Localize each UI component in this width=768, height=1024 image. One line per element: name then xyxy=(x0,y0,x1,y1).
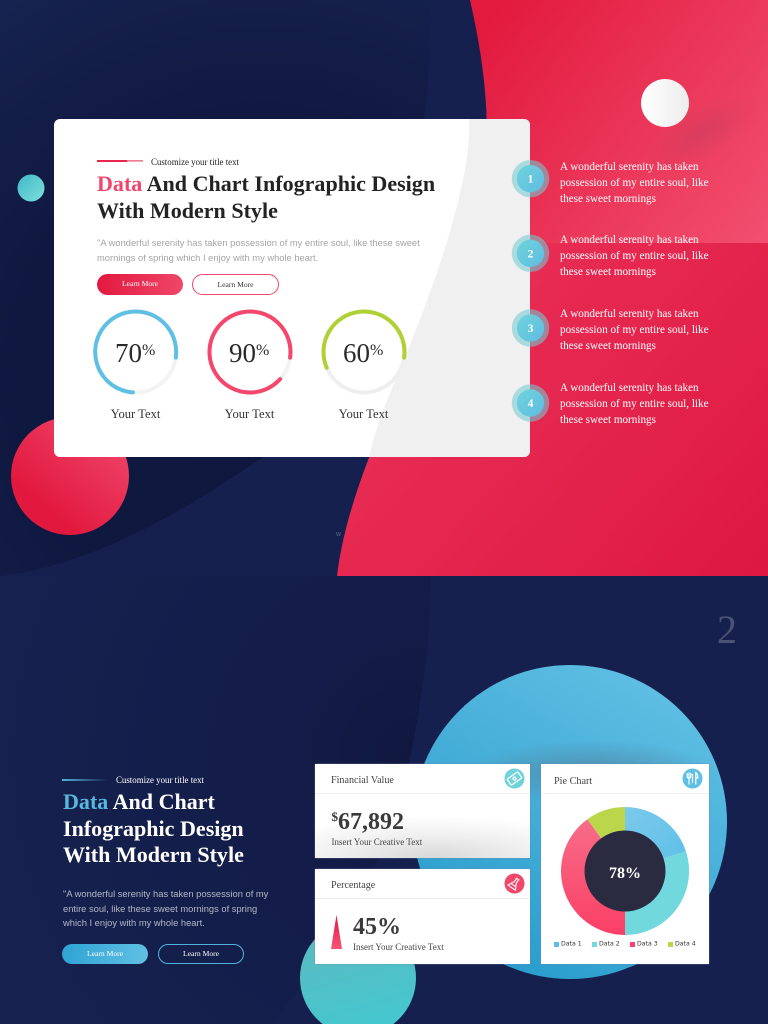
list item 1: A wonderful serenity has taken xyxy=(560,160,699,172)
title second slide: Infographic Design xyxy=(63,816,244,841)
caption: Insert Your Creative Text xyxy=(332,837,422,847)
list item 1: possession of my entire soul, like xyxy=(560,177,709,189)
button: outline blue: Learn More xyxy=(183,949,219,958)
donut chart: Data 3 xyxy=(637,940,658,948)
icon: flask xyxy=(504,874,524,894)
description: "A wonderful serenity has taken possession of my entire soul, like these sweet xyxy=(97,238,420,248)
button: outline blue xyxy=(158,944,244,964)
value: 90%: 90% xyxy=(229,338,269,368)
card heading: Pie Chart xyxy=(554,776,592,786)
eyebrow text: Customize your title text xyxy=(151,156,239,166)
teal circle xyxy=(18,174,44,202)
heading rule xyxy=(97,160,143,162)
list item 4: A wonderful serenity has taken xyxy=(560,382,699,394)
value: 60%: 60% xyxy=(343,338,383,368)
numbered badges: 4 xyxy=(528,398,534,410)
amount: $67,892 xyxy=(332,809,404,835)
list item 2: possession of my entire soul, like xyxy=(560,250,709,262)
description second slide xyxy=(63,889,268,928)
numbered badges: 1 xyxy=(528,174,534,186)
title second slide xyxy=(63,789,244,867)
description: mornings of spring which I enjoy with my whole heart. xyxy=(97,253,318,263)
footer fragment: w xyxy=(336,531,341,538)
blue circle xyxy=(413,665,727,979)
list item 2 xyxy=(560,234,709,278)
panel: pie chart xyxy=(541,764,709,964)
list item 3 xyxy=(560,308,709,352)
description xyxy=(97,238,420,263)
donut chart: Data 2 xyxy=(599,940,620,948)
numbered badges xyxy=(512,160,550,422)
button: filled xyxy=(97,274,183,295)
caption: Insert Your Creative Text xyxy=(353,942,444,952)
donut chart: Data 1 xyxy=(561,940,582,948)
triangle marker xyxy=(331,915,342,949)
red blob xyxy=(337,0,768,576)
teal circle second slide xyxy=(300,939,416,1024)
white circle xyxy=(641,79,689,127)
title: With Modern Style xyxy=(97,198,278,223)
heading rule second slide xyxy=(62,779,106,781)
donut chart: Data 4 xyxy=(675,940,696,948)
description second slide: which I enjoy with my whole heart. xyxy=(63,918,205,928)
list item 4: these sweet mornings xyxy=(560,414,656,426)
icon: banknote xyxy=(504,768,524,788)
red circle xyxy=(11,417,129,535)
label 3: Your Text xyxy=(339,407,388,421)
button: filled: Learn More xyxy=(122,279,158,288)
card heading: Percentage xyxy=(331,880,375,891)
button: outline xyxy=(192,274,279,295)
list item 4 xyxy=(560,382,709,426)
list item 1 xyxy=(560,160,709,205)
list item 4: possession of my entire soul, like xyxy=(560,398,709,410)
label 1: Your Text xyxy=(111,407,160,421)
description second slide: entire soul, like these sweet mornings of spring xyxy=(63,904,257,914)
numbered badges: 3 xyxy=(528,323,534,335)
dark blob xyxy=(0,0,431,576)
panel: financial value xyxy=(315,764,530,858)
donut chart: 78% xyxy=(609,865,641,882)
list item 3: these sweet mornings xyxy=(560,340,656,352)
icon: cutlery xyxy=(682,768,702,788)
label 2: Your Text xyxy=(225,407,274,421)
title second slide: Data And Chart xyxy=(63,789,215,814)
list item 2: these sweet mornings xyxy=(560,266,656,278)
button: filled blue xyxy=(62,944,148,964)
list item 3: A wonderful serenity has taken xyxy=(560,308,699,320)
page number: 2 xyxy=(717,606,737,652)
amount: 45% xyxy=(353,914,401,940)
button: filled blue: Learn More xyxy=(87,949,123,958)
dark shape second slide xyxy=(306,647,426,864)
button: outline: Learn More xyxy=(217,280,254,289)
list item 1: these sweet mornings xyxy=(560,193,656,205)
title: Data And Chart Infographic Design xyxy=(97,171,435,196)
numbered badges: 2 xyxy=(528,248,534,260)
card heading: Financial Value xyxy=(331,775,394,786)
list item 3: possession of my entire soul, like xyxy=(560,324,709,336)
value: 70%: 70% xyxy=(115,338,155,368)
chart: progress rings xyxy=(93,310,406,394)
description second slide: "A wonderful serenity has taken possession of my xyxy=(63,889,268,899)
panel: main white card xyxy=(54,119,530,457)
eyebrow second slide: Customize your title text xyxy=(116,774,204,784)
panel: percentage xyxy=(315,869,530,964)
donut chart xyxy=(554,807,696,948)
title xyxy=(97,171,435,223)
list item 2: A wonderful serenity has taken xyxy=(560,234,699,246)
title second slide: With Modern Style xyxy=(63,842,244,867)
